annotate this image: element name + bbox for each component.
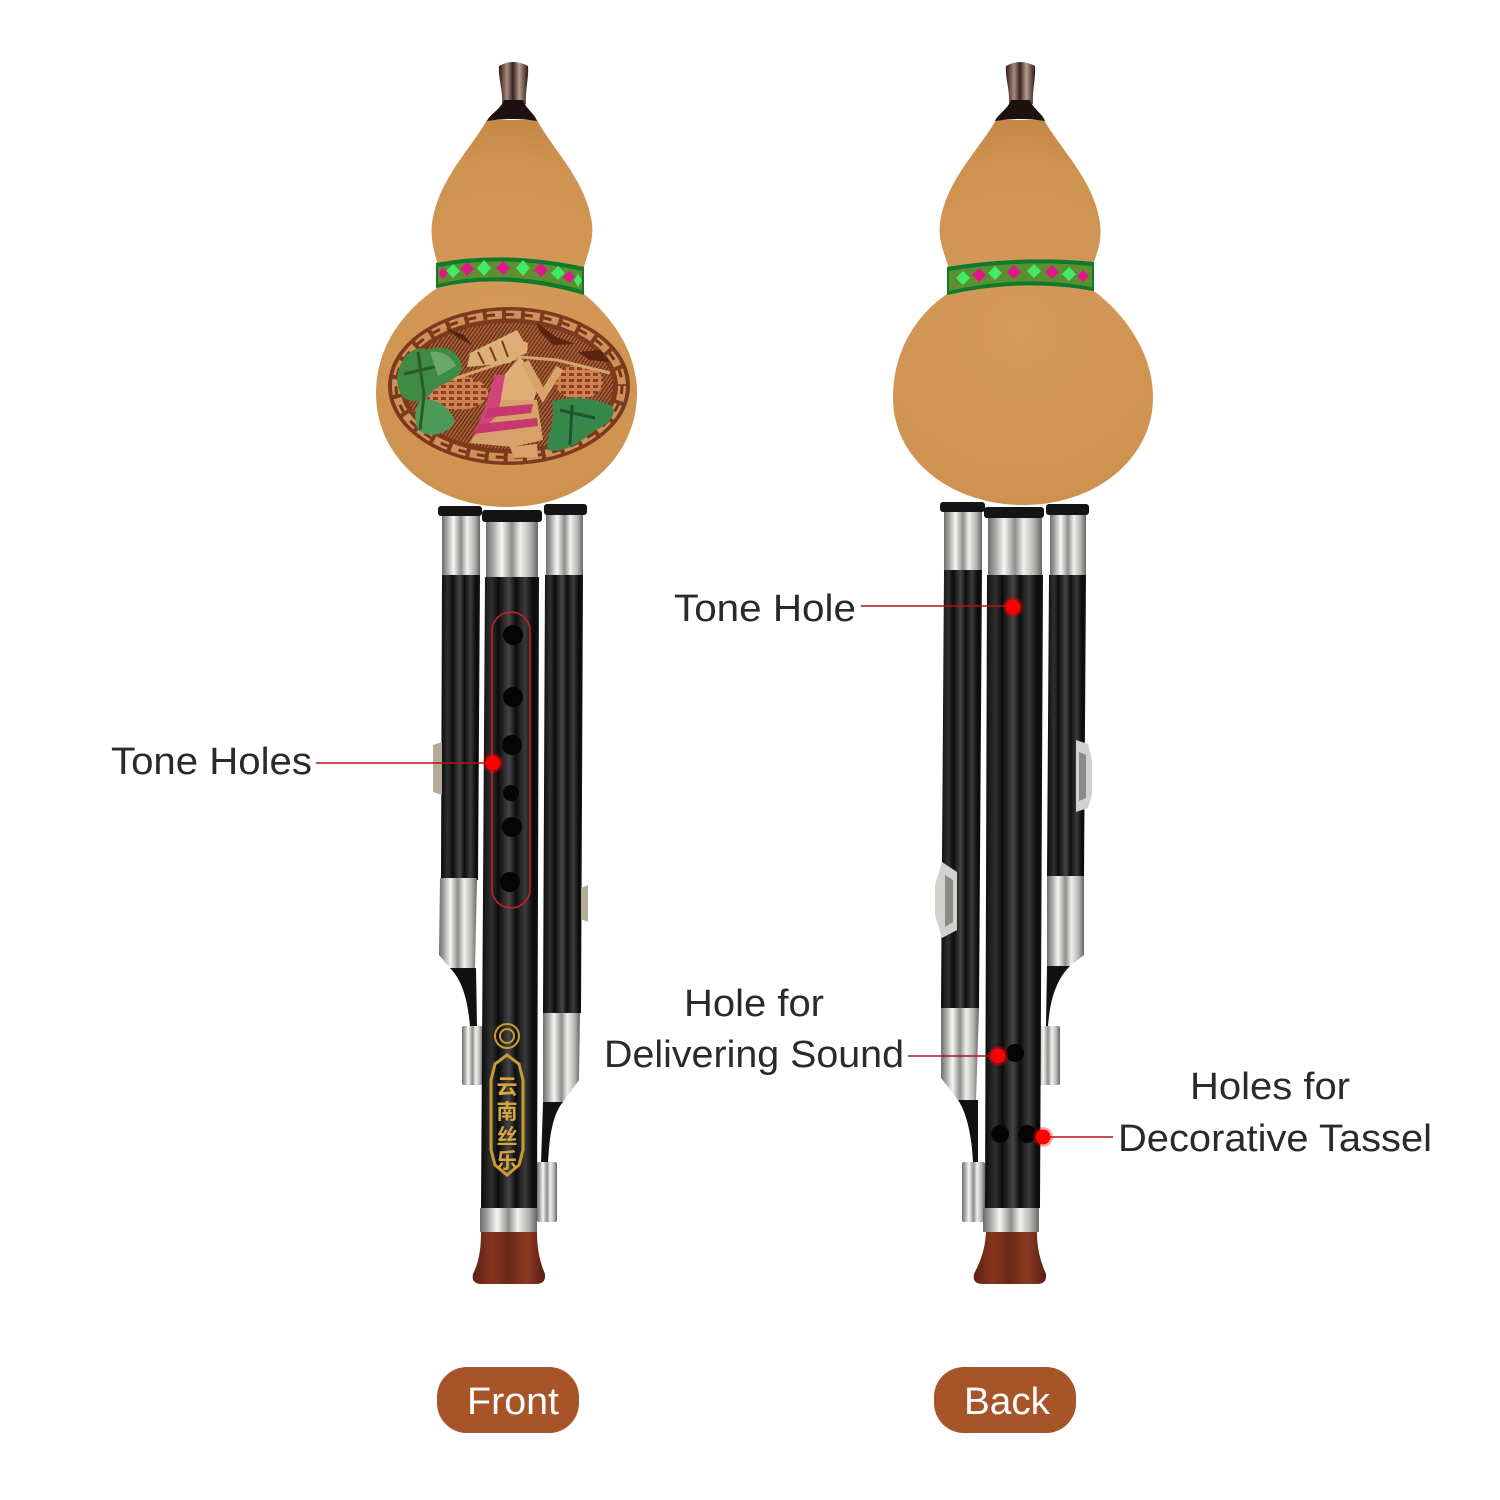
right leaves: [547, 398, 614, 451]
label: back: Back: [964, 1381, 1051, 1423]
front mouthpiece: [487, 62, 537, 121]
back holes: [991, 1044, 1036, 1143]
label: front: Front: [467, 1381, 559, 1423]
carved oval picture: [388, 307, 630, 465]
callout: hole for delivering sound: [604, 983, 1008, 1076]
front finger holes: [500, 625, 523, 892]
callout: tone hole: [674, 588, 1023, 630]
callout: holes for decorative tassel: Holes for: [1190, 1066, 1350, 1108]
front gourd body: [376, 120, 637, 507]
callout: tone holes: [111, 612, 530, 908]
back woven band: [947, 259, 1094, 295]
back left pipe: [935, 502, 985, 1222]
baskets and pole: [428, 357, 610, 410]
front left pipe: [433, 506, 483, 1085]
label: front: [437, 1367, 579, 1433]
back gourd body: [893, 120, 1153, 505]
front hulusi instrument: [376, 62, 637, 1284]
back center pipe: [974, 507, 1046, 1284]
gold logo mark: 云: [496, 1076, 518, 1099]
callout: holes for decorative tassel: [1033, 1066, 1432, 1160]
gold logo mark: 丝: [496, 1126, 518, 1149]
woman figure: [467, 330, 560, 458]
gold logo mark: 南: [496, 1101, 518, 1124]
birds: [445, 322, 610, 362]
front woven band: [436, 257, 584, 295]
front center pipe: [473, 510, 545, 1284]
key pattern border: [388, 307, 630, 465]
back right pipe: [1036, 504, 1092, 1085]
callout: tone hole: Tone Hole: [674, 588, 856, 630]
callout: hole for delivering sound: Hole for: [684, 983, 824, 1025]
callout: holes for decorative tassel: Decorative Tassel: [1118, 1118, 1432, 1160]
label: back: [934, 1367, 1076, 1433]
left leaves: [397, 347, 462, 435]
back mouthpiece: [995, 62, 1045, 121]
back hulusi instrument: [893, 62, 1153, 1284]
callout: tone holes: Tone Holes: [111, 741, 312, 783]
hatched field: [405, 323, 613, 449]
callout: hole for delivering sound: Delivering Sound: [604, 1034, 904, 1076]
gold logo mark: 乐: [496, 1150, 518, 1173]
gold logo mark: [491, 1024, 523, 1175]
front right pipe: [537, 504, 588, 1222]
